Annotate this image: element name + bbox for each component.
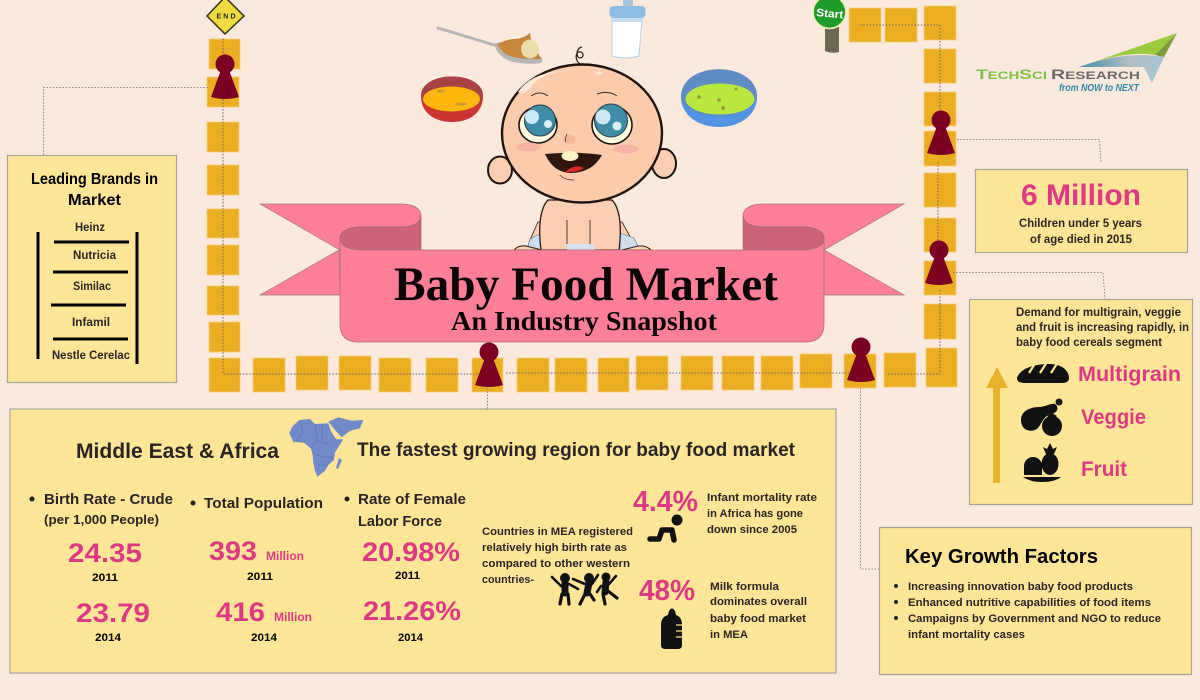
- stat column: female labor force: 2011: [395, 570, 420, 582]
- panel: cereal demand: [970, 300, 1192, 504]
- panel: cereal demand: baby food cereals segment: [1016, 337, 1162, 349]
- stat column: birth rate: Birth Rate - Crude: [44, 491, 173, 508]
- panel: leading brands: Nutricia: [73, 250, 117, 262]
- icon: baby bottle: [661, 608, 682, 649]
- panel: leading brands: [8, 156, 176, 382]
- text: birth rate note: compared to other western: [482, 558, 630, 570]
- connector: key growth factors: [860, 388, 879, 569]
- subtitle: An Industry Snapshot: [451, 306, 717, 336]
- panel: cereal demand: Fruit: [1081, 458, 1127, 481]
- stat column: female labor force: [344, 491, 466, 644]
- logo: TechSci Research: [976, 33, 1177, 94]
- stat column: female labor force: 20.98%: [362, 537, 460, 567]
- stat column: birth rate: 2014: [95, 632, 122, 644]
- icon: children: [552, 572, 617, 604]
- arrow: rising demand: [986, 367, 1008, 483]
- panel: middle east and africa: The fastest growing region for baby food market: [357, 440, 796, 461]
- panel: leading brands: Market: [68, 192, 122, 209]
- stat: milk formula: 48%: [639, 575, 695, 607]
- icon: end sign: END: [216, 14, 236, 20]
- board game path squares: [207, 6, 957, 392]
- stat column: birth rate: (per 1,000 People): [44, 513, 159, 527]
- stat column: total population: 2014: [251, 632, 278, 644]
- ribbon banner: [260, 204, 904, 342]
- icon: fruit plate: [1023, 443, 1061, 482]
- stat column: total population: 393: [209, 536, 257, 566]
- panel: cereal demand: and fruit is increasing rapidly, in: [1016, 322, 1189, 334]
- text: birth rate note: relatively high birth rate as: [482, 542, 627, 554]
- icon: bread: [1017, 362, 1069, 383]
- stat column: total population: Million: [274, 610, 312, 624]
- icon: end sign: [207, 0, 244, 34]
- text: birth rate note: Countries in MEA registered: [482, 526, 633, 538]
- panel: cereal demand: Demand for multigrain, veggie: [1016, 307, 1181, 319]
- stat column: female labor force: 21.26%: [363, 596, 461, 626]
- panel: leading brands: Heinz: [75, 222, 105, 234]
- connector: leading brands: [44, 88, 208, 155]
- icon: start sign: Start: [816, 7, 844, 21]
- logo: TechSci Research: R ESEARCH: [1051, 66, 1140, 82]
- dotted route along the board: [223, 25, 940, 374]
- stat: milk formula: dominates overall: [710, 596, 807, 608]
- pawn: brands: [211, 54, 239, 99]
- stat column: female labor force: 2014: [398, 632, 424, 644]
- panel: key growth factors: Enhanced nutritive capabilities of food items: [908, 597, 1151, 609]
- stat column: total population: Total Population: [204, 495, 323, 512]
- panel: key growth factors: Increasing innovation baby food products: [908, 581, 1133, 593]
- icon: start sign: [813, 0, 846, 53]
- stat: milk formula: Milk formula: [710, 581, 780, 593]
- illustration: baby: [488, 47, 676, 250]
- connector: cereal demand: [953, 272, 1105, 299]
- panel: cereal demand: Veggie: [1081, 406, 1146, 429]
- stat column: female labor force: Labor Force: [358, 513, 442, 530]
- panel: key growth factors: [880, 528, 1192, 674]
- pawn: key growth: [847, 338, 875, 382]
- connector: middle east and africa: [486, 388, 488, 409]
- text: birth rate note: countries-: [482, 574, 534, 586]
- panel: 6 million: Children under 5 years: [1019, 218, 1142, 230]
- stat column: female labor force: Rate of Female: [358, 491, 466, 508]
- map: africa and middle east: [289, 417, 363, 477]
- stat column: total population: Million: [266, 549, 304, 563]
- stat: milk formula: in MEA: [710, 629, 748, 641]
- panel: 6 million: of age died in 2015: [1030, 234, 1133, 246]
- panel: middle east and africa: [10, 409, 836, 673]
- title: Baby Food Market: [394, 258, 778, 311]
- stat column: birth rate: [30, 491, 173, 644]
- panel: leading brands: Leading Brands in: [31, 171, 158, 188]
- panel: 6 million: [976, 170, 1188, 252]
- stat: milk formula: baby food market: [710, 613, 806, 625]
- icon: milk cup: [610, 0, 646, 58]
- stat: infant mortality: [633, 486, 817, 540]
- stat: infant mortality: in Africa has gone: [707, 508, 803, 520]
- panel: leading brands: Similac: [73, 281, 112, 293]
- icon: crawling baby: [650, 514, 682, 540]
- pawn: mea: [475, 342, 503, 387]
- panel: key growth factors: Key Growth Factors: [905, 546, 1098, 568]
- stat column: total population: [190, 495, 323, 644]
- icon: vegetables: [1021, 398, 1062, 436]
- stat: milk formula: [639, 575, 807, 649]
- icon: red bowl: [421, 76, 483, 122]
- stat: infant mortality: 4.4%: [633, 486, 698, 518]
- panel: middle east and africa: Middle East & Africa: [76, 440, 279, 463]
- panel: key growth factors: infant mortality cases: [908, 629, 1025, 641]
- icon: blue bowl: [681, 69, 757, 127]
- panel: leading brands: Nestle Cerelac: [52, 350, 131, 362]
- logo: TechSci Research: from NOW to NEXT: [1059, 83, 1140, 94]
- stat column: total population: 2011: [247, 571, 273, 583]
- panel: 6 million: 6 Million: [1021, 179, 1141, 212]
- panel: cereal demand: Multigrain: [1078, 363, 1181, 386]
- text: birth rate note: [482, 526, 633, 586]
- stat: infant mortality: down since 2005: [707, 524, 797, 536]
- icon: spoon with food: [438, 28, 542, 64]
- stat column: total population: 416: [216, 597, 265, 627]
- pawn: 6 million: [927, 110, 955, 155]
- pawn: cereal demand: [925, 240, 953, 285]
- connector: 6 million: [957, 140, 1101, 162]
- stat column: birth rate: 23.79: [76, 598, 150, 628]
- panel: leading brands: Infamil: [72, 317, 110, 329]
- stat column: birth rate: 2011: [92, 572, 118, 584]
- panel: key growth factors: Campaigns by Government and NGO to reduce: [908, 613, 1161, 625]
- stat column: birth rate: 24.35: [68, 538, 142, 568]
- stat: infant mortality: Infant mortality rate: [707, 492, 817, 504]
- logo: TechSci Research: T ECH S CI: [976, 66, 1047, 82]
